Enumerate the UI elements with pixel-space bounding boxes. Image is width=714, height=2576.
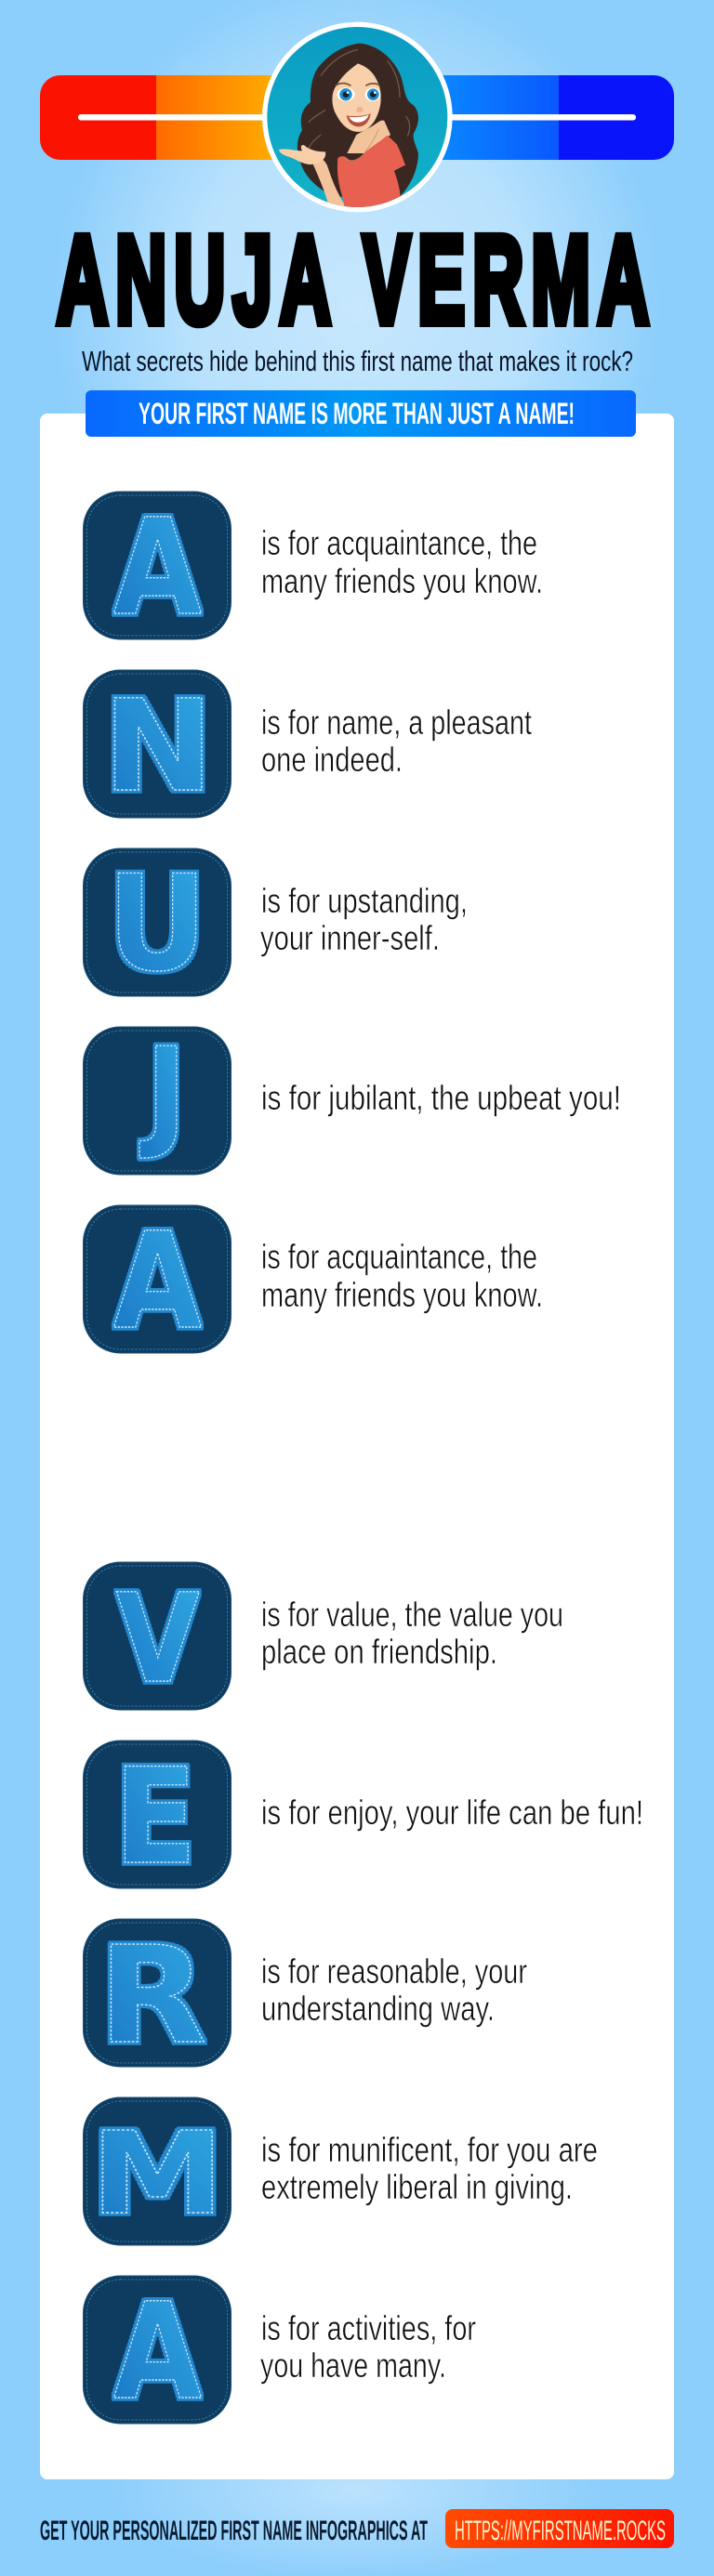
letter tile: A: A xyxy=(113,2275,202,2429)
row: U for upstanding xyxy=(84,848,468,1001)
text: M line: is for munificent, for you are xyxy=(261,2131,598,2169)
portrait: cartoon woman in circle xyxy=(262,22,453,212)
row: V for value xyxy=(84,1562,563,1711)
text: R line: understanding way. xyxy=(261,1990,495,2028)
row: M for munificent xyxy=(84,2097,598,2245)
text: V line xyxy=(261,1596,563,1671)
text: M line xyxy=(261,2131,598,2206)
text: V line: is for value, the value you xyxy=(261,1596,563,1634)
row: R for reasonable xyxy=(84,1917,527,2073)
letter tile: V: V xyxy=(116,1569,200,1711)
text: J line: is for jubilant, the upbeat you! xyxy=(261,1079,621,1117)
text: R line: is for reasonable, your xyxy=(261,1952,527,1991)
row: J for jubilant xyxy=(84,1023,621,1175)
title: ANUJA VERMA xyxy=(57,211,656,349)
letter tile: E: E xyxy=(113,1741,197,1894)
text: R line xyxy=(261,1952,527,2028)
footer url button xyxy=(445,2509,674,2548)
letter tile: J: J xyxy=(139,1023,187,1163)
text: A line: you have many. xyxy=(260,2346,446,2385)
letter tile: E xyxy=(84,1741,231,1894)
row: E for enjoy xyxy=(84,1741,643,1894)
letter tile: R: R xyxy=(99,1917,206,2073)
text: V line: place on friendship. xyxy=(261,1633,497,1671)
text: A line xyxy=(260,2309,476,2385)
letter tile: A xyxy=(84,491,231,645)
letter tile: A xyxy=(84,1204,231,1359)
letter tile: A: A xyxy=(113,491,202,645)
letter tile: U xyxy=(84,848,231,1001)
banner xyxy=(86,390,636,437)
letter tile: J xyxy=(84,1023,231,1175)
letter tile: M: M xyxy=(90,2108,225,2240)
text: A line: many friends you know. xyxy=(261,1276,543,1314)
text: U line: your inner-self. xyxy=(260,919,440,957)
letter tile: V xyxy=(84,1562,231,1711)
letter tile: A xyxy=(84,2275,231,2429)
text: M line: extremely liberal in giving. xyxy=(261,2168,573,2206)
text: A line xyxy=(261,524,543,600)
letter tile: N: N xyxy=(102,673,214,820)
letter tile: U: U xyxy=(107,848,207,1001)
letter tile: A: A xyxy=(113,1204,202,1359)
white content panel xyxy=(40,414,674,2479)
text: N line xyxy=(261,703,533,779)
text: U line: is for upstanding, xyxy=(261,882,468,920)
text: A line: is for activities, for xyxy=(261,2309,476,2347)
row: A for acquaintance (second) xyxy=(84,1204,543,1359)
text: A line: many friends you know. xyxy=(261,562,543,600)
text: A line: is for acquaintance, the xyxy=(261,524,537,562)
text: A line xyxy=(261,1238,543,1314)
text: N line: is for name, a pleasant xyxy=(261,703,533,742)
row: A for activities xyxy=(84,2275,476,2429)
text: A line: is for acquaintance, the xyxy=(261,1238,537,1276)
text: N line: one indeed. xyxy=(261,741,403,779)
row: A for acquaintance xyxy=(84,491,543,645)
header colour bar xyxy=(40,75,674,160)
text: U line xyxy=(260,882,468,957)
row: N for name xyxy=(84,670,533,820)
